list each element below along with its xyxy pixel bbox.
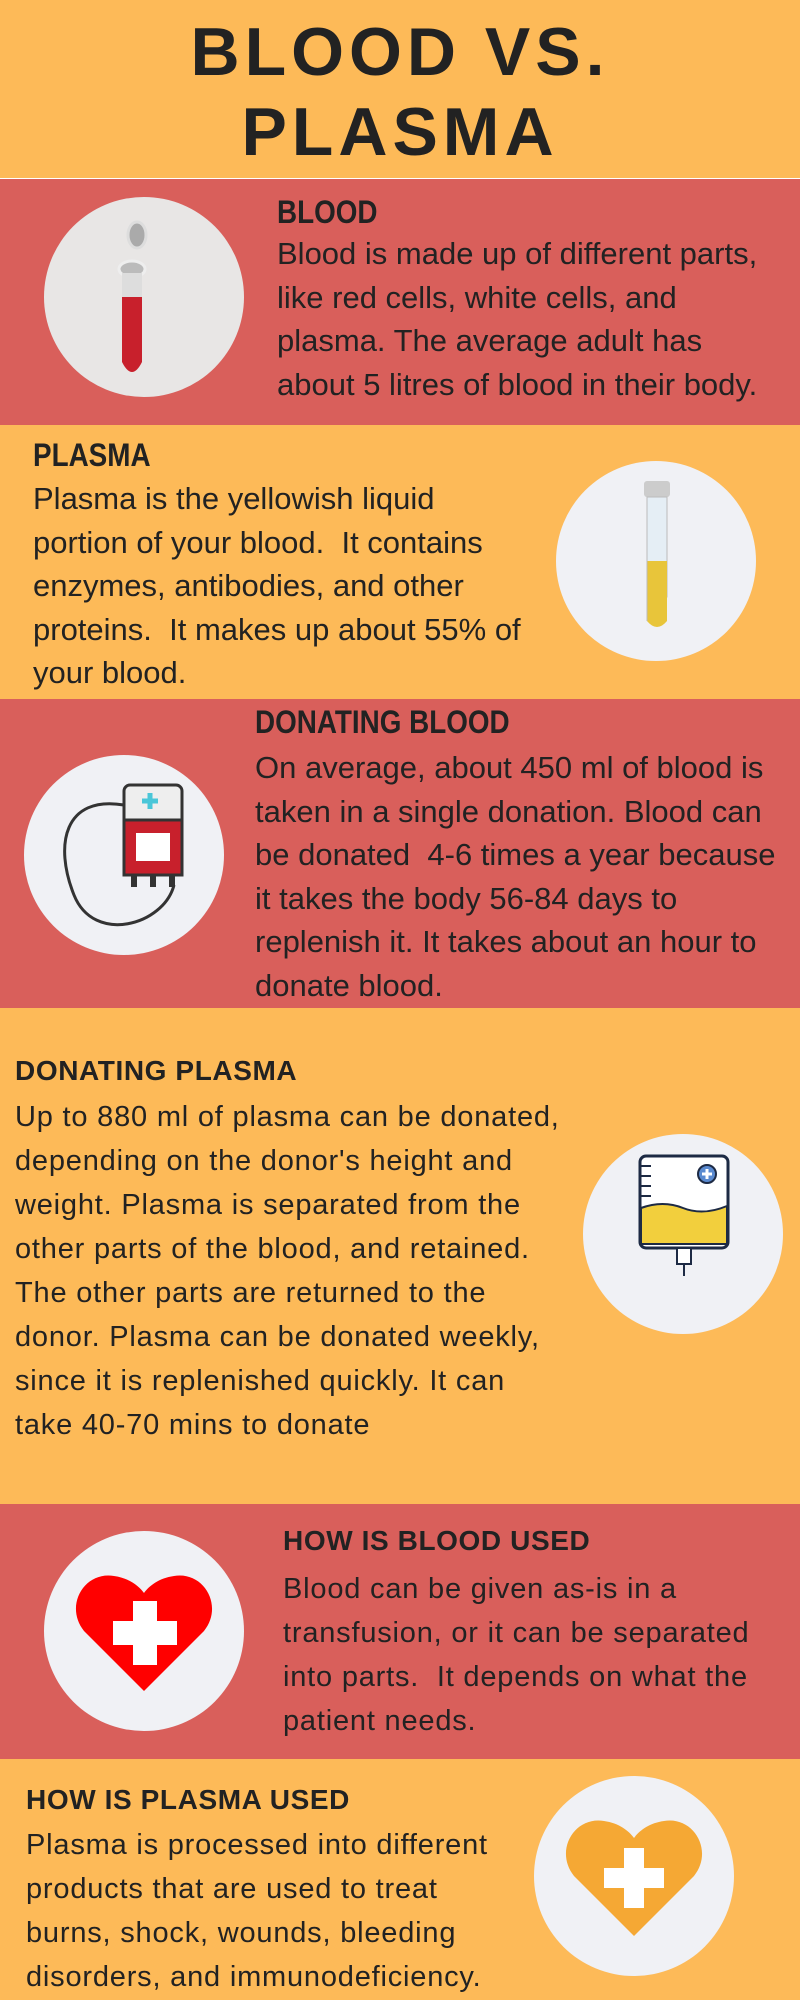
- icon: blood bag: [24, 755, 224, 955]
- text: how is plasma used: disorders, and immunodeficiency.: [26, 1961, 481, 1993]
- text: how is blood used: into parts. It depends on what the: [283, 1661, 748, 1693]
- title: [0, 0, 800, 178]
- text: how is blood used: [283, 1573, 749, 1737]
- text: donating plasma: other parts of the blood, and retained.: [15, 1233, 530, 1265]
- text: how is plasma used: Plasma is processed into different: [26, 1829, 488, 1861]
- text: donating blood: [255, 750, 775, 1002]
- text: blood: about 5 litres of blood in their body.: [277, 366, 757, 402]
- icon: plasma bag: [583, 1134, 783, 1334]
- text: donating plasma: [15, 1101, 560, 1441]
- text: how is blood used: patient needs.: [283, 1705, 476, 1737]
- text: donating plasma: weight. Plasma is separated from the: [15, 1189, 521, 1221]
- text: donating plasma: since it is replenished quickly. It can: [15, 1365, 505, 1397]
- icon: orange heart: [534, 1776, 734, 1976]
- heading: plasma: PLASMA: [33, 437, 151, 473]
- panel: how is blood used: [0, 1504, 800, 1759]
- title: PLASMA: [241, 94, 559, 170]
- text: donating blood: taken in a single donation. Blood can: [255, 794, 762, 828]
- text: donating plasma: Up to 880 ml of plasma can be donated,: [15, 1101, 560, 1133]
- heading: how is blood used: HOW IS BLOOD USED: [283, 1525, 590, 1556]
- icon: red heart: [44, 1531, 244, 1731]
- text: plasma: Plasma is the yellowish liquid: [33, 481, 434, 516]
- text: donating plasma: depending on the donor's height and: [15, 1145, 513, 1177]
- text: blood: plasma. The average adult has: [277, 323, 702, 358]
- title: BLOOD VS.: [190, 14, 610, 90]
- icon: plasma tube: [556, 461, 756, 661]
- panel: how is plasma used: [0, 1759, 800, 2000]
- panel: blood: [0, 179, 800, 425]
- text: plasma: proteins. It makes up about 55% of: [33, 612, 521, 646]
- text: donating plasma: The other parts are returned to the: [15, 1277, 486, 1309]
- text: donating blood: replenish it. It takes about an hour to: [255, 924, 756, 959]
- heading: how is plasma used: HOW IS PLASMA USED: [26, 1784, 350, 1815]
- text: donating plasma: take 40-70 mins to donate: [15, 1409, 370, 1441]
- text: how is plasma used: burns, shock, wounds, bleeding: [26, 1917, 456, 1949]
- text: donating blood: be donated 4-6 times a year because: [255, 837, 775, 872]
- text: how is blood used: Blood can be given as-is in a: [283, 1573, 677, 1605]
- text: plasma: portion of your blood. It contains: [33, 524, 483, 560]
- heading: donating blood: DONATING BLOOD: [255, 704, 510, 740]
- text: how is plasma used: products that are used to treat: [26, 1873, 438, 1905]
- text: donating plasma: donor. Plasma can be donated weekly,: [15, 1321, 540, 1353]
- text: plasma: your blood.: [33, 655, 186, 690]
- text: blood: Blood is made up of different parts,: [277, 236, 757, 271]
- text: how is blood used: transfusion, or it can be separated: [283, 1617, 749, 1649]
- heading: donating plasma: DONATING PLASMA: [15, 1055, 297, 1086]
- text: blood: like red cells, white cells, and: [277, 280, 677, 314]
- heading: blood: BLOOD: [277, 194, 378, 230]
- panel: donating blood: [0, 699, 800, 1008]
- panel: donating plasma: [0, 1008, 800, 1504]
- panel: plasma: [0, 425, 800, 699]
- text: plasma: enzymes, antibodies, and other: [33, 568, 464, 603]
- text: blood: [277, 236, 757, 402]
- text: plasma: [33, 481, 521, 690]
- text: donating blood: it takes the body 56-84 days to: [255, 880, 677, 916]
- text: how is plasma used: [26, 1829, 488, 1993]
- text: donating blood: On average, about 450 ml of blood is: [255, 750, 763, 785]
- icon: blood tube: [44, 197, 244, 397]
- text: donating blood: donate blood.: [255, 968, 443, 1002]
